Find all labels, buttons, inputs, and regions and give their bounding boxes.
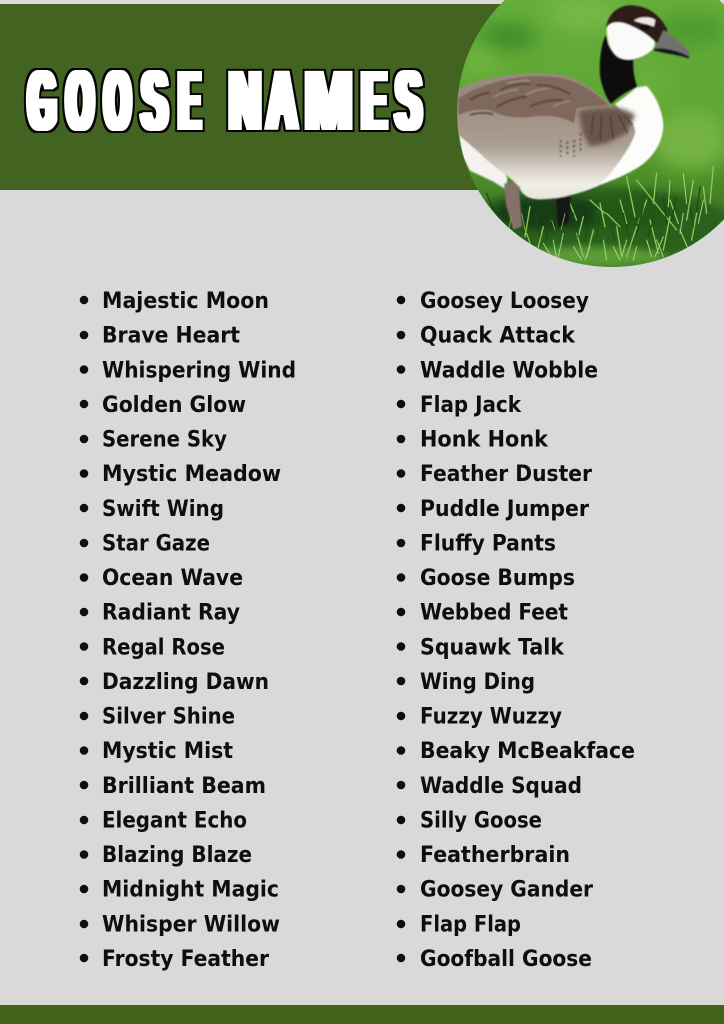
item: Star Gaze [102, 531, 210, 556]
rear white feathers [459, 134, 508, 190]
item: Midnight Magic [102, 878, 279, 903]
item: Brilliant Beam [102, 774, 266, 799]
title: N [229, 54, 261, 148]
footer band [0, 1005, 724, 1024]
white cheek [607, 22, 655, 60]
item: Majestic Moon [102, 289, 269, 314]
title: O [105, 53, 130, 148]
title: G [28, 54, 56, 148]
title [28, 53, 421, 149]
item: Flap Jack [420, 393, 522, 418]
photo: goose on grass in circle [443, 0, 724, 273]
chest white [600, 86, 663, 185]
item: Honk Honk [420, 428, 549, 452]
item: Puddle Jumper [420, 497, 589, 522]
grass foreground mass [463, 187, 724, 260]
title: A [267, 55, 297, 149]
item: Squawk Talk [420, 635, 565, 660]
item: Goofball Goose [420, 947, 592, 972]
goose [457, 5, 689, 229]
item: Featherbrain [420, 843, 570, 868]
names list: right column [397, 289, 635, 972]
item: Beaky McBeakface [420, 739, 635, 764]
item: Blazing Blaze [102, 843, 252, 868]
item: Brave Heart [102, 324, 240, 349]
title: E [179, 55, 200, 148]
title: S [142, 53, 167, 148]
item: Regal Rose [102, 635, 225, 660]
title: S [396, 53, 421, 148]
item: Mystic Mist [102, 739, 233, 764]
item: Flap Flap [420, 912, 521, 937]
names list: left column [80, 289, 296, 972]
item: Mystic Meadow [102, 462, 281, 487]
title: M [305, 55, 352, 148]
dark shoulder fringe [578, 108, 635, 147]
item: Dazzling Dawn [102, 670, 269, 695]
head cap [606, 5, 667, 43]
blades over legs [509, 213, 565, 230]
item: Elegant Echo [102, 808, 247, 834]
eye [640, 24, 650, 31]
header band [0, 4, 520, 190]
item: Goose Bumps [420, 566, 575, 591]
item: Silly Goose [420, 808, 542, 834]
body with taupe-to-white gradient [457, 73, 647, 199]
item: Quack Attack [420, 324, 576, 349]
item: Frosty Feather [102, 947, 269, 972]
item: Fluffy Pants [420, 531, 556, 556]
item: Golden Glow [102, 393, 246, 418]
wing brown [458, 76, 608, 123]
item: Wing Ding [420, 670, 535, 695]
wing feather marks [470, 84, 570, 115]
item: Ocean Wave [102, 566, 243, 591]
item: Fuzzy Wuzzy [420, 705, 562, 730]
item: Goosey Gander [420, 878, 593, 903]
item: Silver Shine [102, 705, 235, 730]
rear leg [504, 182, 522, 229]
item: Radiant Ray [102, 601, 240, 626]
title: O [67, 53, 93, 148]
item: Webbed Feet [420, 601, 568, 626]
item: Waddle Squad [420, 774, 582, 799]
eye patch [634, 17, 655, 27]
item: Whispering Wind [102, 358, 296, 383]
grass blades [487, 167, 713, 260]
neck [600, 35, 637, 104]
item: Waddle Wobble [420, 358, 598, 383]
item: Swift Wing [102, 497, 224, 522]
item: Serene Sky [102, 428, 227, 452]
item: Feather Duster [420, 462, 592, 487]
beak [654, 30, 689, 57]
speckles [561, 133, 581, 157]
title: E [362, 53, 386, 148]
item: Goosey Loosey [420, 289, 589, 314]
item: Whisper Willow [102, 912, 280, 937]
front leg [556, 197, 571, 227]
